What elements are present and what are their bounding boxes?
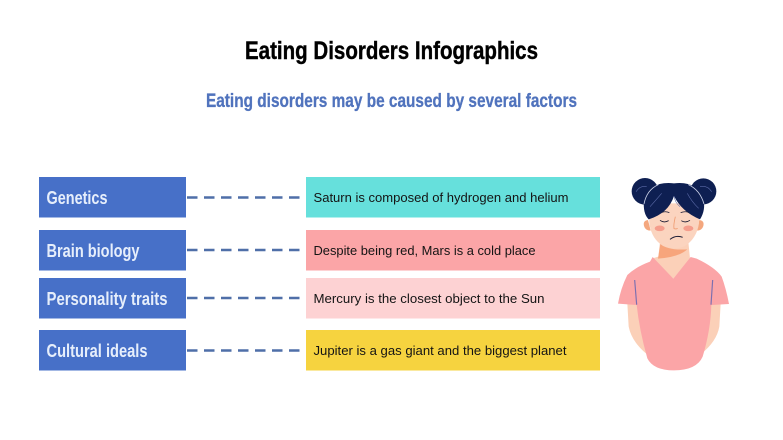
face [648, 203, 699, 248]
description: personality traits [306, 278, 600, 318]
connector: cultural ideals [187, 349, 300, 352]
arms [627, 303, 721, 354]
subtitle: Eating disorders may be caused by several factors [206, 90, 577, 112]
description: genetics [306, 177, 600, 218]
hair strands [636, 186, 712, 208]
description: genetics: Saturn is composed of hydrogen and helium [314, 190, 568, 205]
description: cultural ideals: Jupiter is a gas giant and the biggest planet [314, 343, 567, 358]
description: brain biology: Despite being red, Mars is a cold place [314, 243, 536, 258]
row: personality traits [39, 278, 600, 318]
connector: personality traits [187, 297, 300, 299]
connector: genetics [187, 196, 300, 199]
description: brain biology [306, 230, 600, 270]
nose [674, 217, 678, 229]
label: cultural ideals [39, 330, 186, 370]
neck [652, 242, 690, 279]
connector: brain biology [187, 249, 300, 251]
description: cultural ideals [306, 330, 600, 370]
sleeve lines [635, 280, 713, 305]
eyes [660, 212, 690, 222]
hair [644, 183, 704, 219]
cheeks [655, 225, 665, 231]
label: personality traits: Personality traits [46, 289, 168, 309]
description: personality traits: Mercury is the closest object to the Sun [314, 291, 544, 306]
label: genetics [39, 177, 186, 218]
label: brain biology: Brain biology [46, 241, 140, 261]
row: cultural ideals [39, 330, 600, 370]
label: genetics: Genetics [46, 188, 108, 208]
mouth [670, 236, 683, 239]
hair highlights [644, 185, 704, 204]
title: Eating Disorders Infographics [245, 37, 538, 65]
shirt [618, 257, 729, 370]
label: personality traits [39, 278, 186, 318]
row: brain biology [39, 230, 600, 270]
label: cultural ideals: Cultural ideals [46, 341, 148, 361]
character illustration [618, 178, 729, 370]
neck shadow [658, 244, 687, 259]
hair buns [632, 178, 658, 205]
ears [644, 220, 704, 231]
row: genetics [39, 177, 600, 218]
label: brain biology [39, 230, 186, 270]
